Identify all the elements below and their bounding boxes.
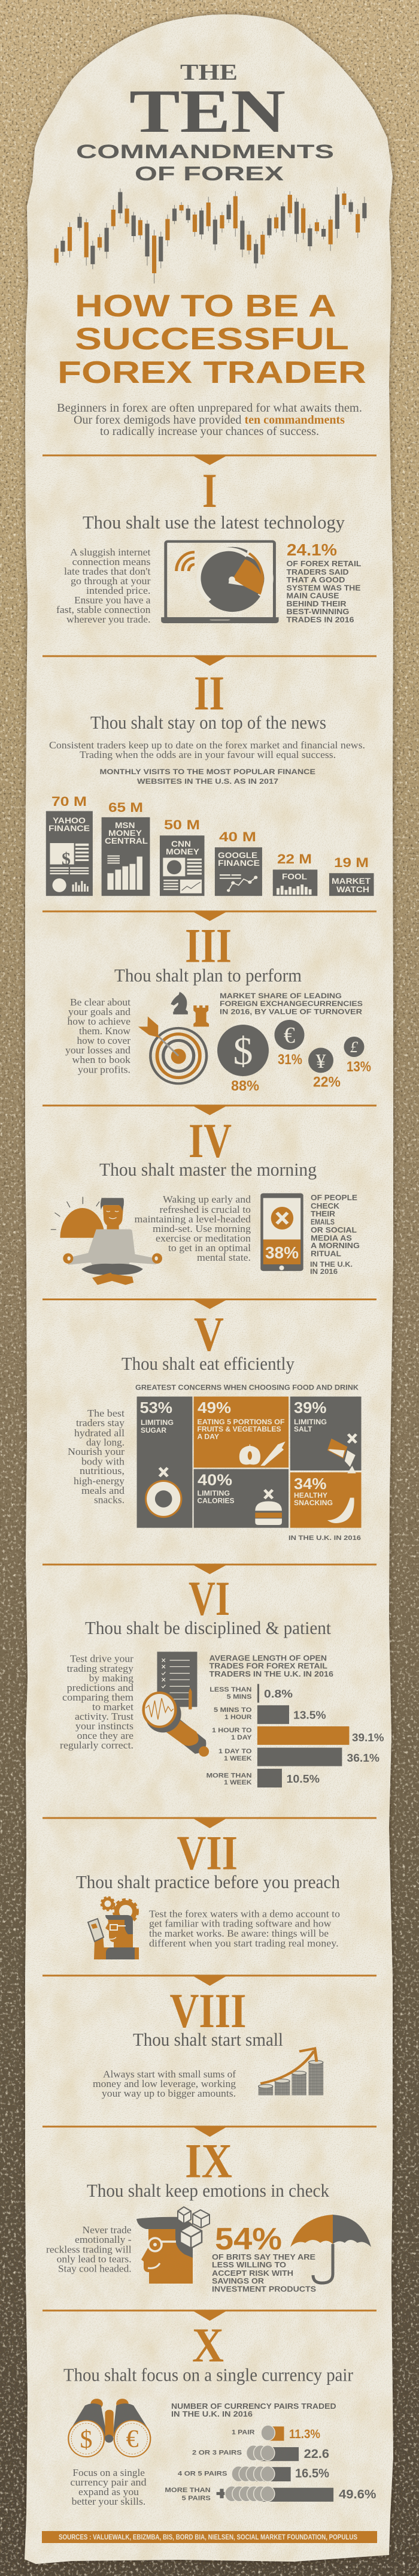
chart title: TRADERS IN THE U.K. IN 2016 <box>210 1669 333 1678</box>
bar labels <box>48 816 371 894</box>
stat text: IN THE U.K. <box>310 1260 353 1269</box>
row labels: 1 DAY <box>231 1734 252 1741</box>
row labels: 1 WEEK <box>224 1779 252 1786</box>
text block: get familiar with trading software and how <box>149 1918 332 1929</box>
row labels: 4 OR 5 PAIRS <box>178 2470 227 2477</box>
stat: 24.1%: BEHIND THEIR <box>286 599 347 608</box>
text block <box>68 1408 125 1506</box>
panel: commandment IV <box>51 1113 360 1285</box>
text block <box>93 2068 236 2099</box>
text block: Stay cool headed. <box>58 2263 132 2275</box>
title: TEN <box>129 77 286 146</box>
chart title: TRADES FOR FOREX RETAIL <box>210 1662 327 1671</box>
tile labels: SNACKING <box>294 1499 333 1507</box>
values: 22.6 <box>304 2447 329 2461</box>
values <box>289 2427 377 2502</box>
bar labels: MSN <box>115 820 135 830</box>
text block: A sluggish internet <box>70 546 151 558</box>
text block: reckless trading will <box>46 2244 132 2255</box>
text block: go through at your <box>71 575 151 587</box>
text block: day long. <box>86 1437 125 1448</box>
bars <box>46 811 374 896</box>
icon: binoculars: € <box>126 2426 139 2453</box>
values: 49.6% <box>339 2488 377 2502</box>
text block <box>56 546 151 625</box>
text block <box>60 1653 134 1751</box>
tile labels: HEALTHY <box>294 1491 327 1499</box>
text block: intended price. <box>86 585 151 596</box>
text block <box>70 2467 147 2507</box>
text block: Ensure you have a <box>74 594 151 606</box>
text block: nutritious, <box>80 1465 125 1476</box>
text block: Trading when the odds are in your favour will equal success. <box>80 749 336 760</box>
stat: 24.1%: MAIN CAUSE <box>286 591 339 600</box>
panel: commandment VIII: Thou shalt start small <box>133 2029 283 2050</box>
chart title: IN 2016, BY VALUE OF TURNOVER <box>220 1008 362 1016</box>
icon: checklist and magnifier <box>144 1652 209 1757</box>
tile labels: 39% <box>294 1399 327 1417</box>
intro text: Our forex demigods have provided ten commandments <box>74 413 345 427</box>
text block: by making <box>89 1672 134 1684</box>
text block: body with <box>81 1456 125 1467</box>
text block: your losses and <box>65 1044 131 1056</box>
chart note: IN THE U.K. IN 2016 <box>289 1535 361 1542</box>
stat text: CHECK <box>311 1201 340 1210</box>
panel: commandment IV: Thou shalt master the morning <box>99 1159 317 1180</box>
text block: Nourish your <box>68 1446 125 1457</box>
bar labels: MONEY <box>166 847 200 856</box>
title: COMMANDMENTS <box>76 141 334 162</box>
bubble chart: currencies: $ <box>233 1029 253 1073</box>
text block <box>149 1908 340 1949</box>
panel: commandment VII <box>76 1825 340 1959</box>
sources bar: SOURCES : VALUEWALK, EBIZMBA, BIS, BORD BIA, NIELSEN, SOCIAL MARKET FOUNDATION, POPULUS <box>59 2533 357 2541</box>
row labels: 5 MINS TO <box>214 1707 252 1714</box>
text block: currency pair and <box>70 2477 147 2488</box>
text block: Never trade <box>83 2224 132 2236</box>
text block: comparing them <box>62 1692 133 1703</box>
row labels: 1 HOUR <box>224 1714 252 1721</box>
values: 36.1% <box>347 1752 379 1764</box>
row labels: MORE THAN <box>207 1772 252 1780</box>
values: 11.3% <box>289 2427 320 2441</box>
panel: commandment X: Thou shalt focus on a single currency pair <box>63 2364 354 2385</box>
stat: 54%: ACCEPT RISK WITH <box>212 2269 293 2278</box>
bar icons <box>50 843 312 895</box>
text block: your profits. <box>78 1064 130 1075</box>
text block: hydrated all <box>74 1427 125 1439</box>
stat: 24.1% <box>286 540 362 624</box>
candlestick chart <box>54 187 366 283</box>
tile labels: A DAY <box>198 1432 219 1440</box>
text block: emotionally - <box>75 2234 132 2245</box>
text block <box>134 1194 251 1263</box>
text block: Test drive your <box>70 1653 133 1665</box>
text block: once they are <box>77 1730 133 1741</box>
bar labels: YAHOO <box>53 816 86 825</box>
stat text: OF PEOPLE <box>311 1193 357 1202</box>
panel: commandment V: Thou shalt eat efficiently <box>122 1353 294 1374</box>
bar labels: MARKET <box>332 876 371 886</box>
icon: laptop with speed gauge and wifi <box>161 542 279 623</box>
panel: commandment II <box>46 666 374 896</box>
text block: Test the forex waters with a demo account to <box>149 1908 340 1920</box>
subtitle: SUCCESSFUL <box>75 322 349 357</box>
panel: commandment V: V <box>194 1307 224 1361</box>
stat: 24.1%: THAT A GOOD <box>286 575 345 584</box>
values: 10.5% <box>286 1773 320 1785</box>
text block: Always start with small sums of <box>103 2068 236 2080</box>
tile labels: FRUITS & VEGETABLES <box>198 1425 281 1433</box>
text block: maintaining a level-headed <box>134 1213 251 1225</box>
row labels: 5 MINS <box>227 1693 251 1701</box>
chart title: NUMBER OF CURRENCY PAIRS TRADED <box>171 2402 336 2411</box>
row labels: 1 HOUR TO <box>212 1727 252 1734</box>
stat text: THEIR <box>311 1209 336 1218</box>
bubble chart: currencies: 88% <box>231 1078 259 1094</box>
text block: your instincts <box>75 1720 133 1732</box>
text block <box>49 739 365 760</box>
stat: 54%: LESS WILLING TO <box>212 2260 286 2269</box>
text block: your goals and <box>68 1006 131 1017</box>
text block: better your skills. <box>72 2496 145 2507</box>
panel: commandment IV: IV <box>189 1113 232 1168</box>
bubble chart: currencies: 31% <box>278 1052 302 1068</box>
stat: 54%: 54% <box>215 2222 282 2257</box>
icon: growing coin stacks with arrow <box>259 2049 323 2095</box>
tile labels: CALORIES <box>198 1497 235 1505</box>
tile labels: LIMITING <box>294 1418 327 1426</box>
stat: 24.1%: 24.1% <box>287 540 337 559</box>
stat text: EMAILS <box>311 1218 335 1227</box>
bar labels: WATCH <box>336 884 369 894</box>
stat: 54% <box>212 2222 316 2294</box>
bar labels: MONEY <box>108 828 142 838</box>
tile labels: EATING 5 PORTIONS OF <box>198 1418 285 1426</box>
bar chart: currency pairs <box>165 2425 377 2502</box>
text block: late trades that don't <box>64 566 151 577</box>
bars <box>257 1684 349 1787</box>
bubble chart: currencies: ¥ <box>316 1050 326 1073</box>
panel: commandment I: Thou shalt use the latest technology <box>83 512 345 533</box>
tile labels: 49% <box>198 1399 231 1417</box>
subtitle: FOREX TRADER <box>57 355 366 390</box>
row labels: 1 PAIR <box>232 2429 254 2436</box>
tile labels: LIMITING <box>141 1418 174 1427</box>
panel: commandment IX: Thou shalt keep emotions in check <box>87 2180 329 2201</box>
icon: trader with phone and gears <box>88 1897 139 1959</box>
stat: 24.1%: SYSTEM WAS THE <box>286 584 361 592</box>
text block: Focus on a single <box>72 2467 145 2478</box>
stat: 54%: OF BRITS SAY THEY ARE <box>212 2252 315 2261</box>
chart title <box>99 768 315 786</box>
panel: commandment V <box>68 1307 362 1542</box>
stat text: OR SOCIAL <box>311 1225 357 1234</box>
bar labels: FINANCE <box>218 858 260 868</box>
title: OF FOREX <box>135 162 284 185</box>
text block: exercise or meditation <box>156 1233 251 1244</box>
values: 0.8% <box>264 1688 293 1700</box>
panel: commandment II: Thou shalt stay on top of the news <box>90 712 326 733</box>
row labels: 1 WEEK <box>224 1755 252 1762</box>
panel: commandment IX <box>46 2133 371 2294</box>
title: THE <box>180 60 238 85</box>
panel: commandment X: X <box>192 2318 224 2372</box>
text block: traders stay <box>76 1417 125 1429</box>
text block: mind-set. Use morning <box>153 1223 251 1234</box>
icon: umbrella <box>290 2215 371 2283</box>
text block: how to cover <box>77 1035 130 1046</box>
text block: wherever you trade. <box>66 614 151 625</box>
text block: only lead to tears. <box>57 2254 132 2265</box>
panel: commandment VII: Thou shalt practice before you preach <box>76 1871 340 1892</box>
values: 65 M <box>108 800 143 815</box>
bar labels: CENTRAL <box>105 836 148 845</box>
subtitle <box>57 289 366 390</box>
stat text <box>310 1193 360 1276</box>
bar chart: open trade length <box>207 1684 384 1787</box>
text block: to get in an optimal <box>168 1242 251 1254</box>
bar labels: GOOGLE <box>218 850 257 860</box>
text block: high-energy <box>74 1475 125 1487</box>
text block: how to achieve <box>67 1016 130 1027</box>
chart title: MONTHLY VISITS TO THE MOST POPULAR FINANCE <box>99 768 315 776</box>
text block: expand as you <box>78 2486 139 2498</box>
bar labels: FOOL <box>282 871 307 881</box>
tile labels: 53% <box>140 1399 172 1417</box>
section dividers <box>42 454 377 2321</box>
bar chart: monthly visits: $ <box>62 849 71 869</box>
text block: your way up to bigger amounts. <box>102 2088 236 2099</box>
values: 40 M <box>219 829 256 844</box>
text block: the market works. Be aware: things will be <box>149 1928 329 1939</box>
row labels: LESS THAN <box>210 1686 251 1693</box>
stat: 24.1%: TRADES IN 2016 <box>286 615 354 624</box>
stat text: MEDIA AS <box>311 1233 352 1243</box>
text block: connection means <box>72 556 151 567</box>
chart title <box>220 992 363 1016</box>
values: 13.5% <box>293 1709 326 1721</box>
bars and coins <box>217 2425 333 2502</box>
text block: to market <box>92 1701 133 1713</box>
text block: money and low leverage, working <box>93 2078 236 2089</box>
sources bar <box>42 2531 377 2543</box>
text block: snacks. <box>94 1494 125 1506</box>
text block: trading strategy <box>67 1663 134 1674</box>
stat: 24.1%: TRADERS SAID <box>286 567 348 576</box>
panel: commandment I <box>56 463 362 625</box>
icon: meditating man and sun <box>51 1197 162 1285</box>
panel: commandment III: Thou shalt plan to perform <box>114 965 302 986</box>
panel: commandment I: I <box>202 463 217 518</box>
text block: fast, stable connection <box>56 604 151 615</box>
chart title <box>171 2402 336 2418</box>
text block: Consistent traders keep up to date on the forex market and financial news. <box>49 739 365 751</box>
stat: 54%: INVESTMENT PRODUCTS <box>212 2284 316 2294</box>
panel: commandment X <box>42 2318 377 2543</box>
stat text: A MORNING <box>311 1241 360 1250</box>
stat: 24.1%: OF FOREX RETAIL <box>286 559 362 568</box>
chart title: FOREIGN EXCHANGECURRENCIES <box>220 999 363 1008</box>
tile labels: LIMITING <box>198 1489 230 1497</box>
text block: Waking up early and <box>163 1194 251 1205</box>
intro text: Beginners in forex are often unprepared for what awaits them. <box>57 401 362 415</box>
treemap: food concerns <box>137 1397 362 1528</box>
bubble chart: currencies: 22% <box>313 1074 341 1091</box>
bar chart: monthly visits <box>46 794 374 896</box>
icon: chess pieces and target <box>138 992 209 1083</box>
stat: 54%: SAVINGS OR <box>212 2276 265 2285</box>
row labels <box>207 1686 252 1786</box>
chart title: GREATEST CONCERNS WHEN CHOOSING FOOD AND DRINK <box>135 1384 359 1392</box>
text block: activity. Trust <box>75 1711 133 1722</box>
text block: different when you start trading real money. <box>149 1938 339 1949</box>
text block: when to book <box>72 1054 131 1065</box>
text block: mental state. <box>197 1252 251 1263</box>
text block <box>65 996 131 1075</box>
panel: commandment VII: VII <box>177 1825 238 1880</box>
tile labels: 34% <box>294 1475 327 1493</box>
text block: regularly correct. <box>60 1740 133 1751</box>
panel: commandment VI: Thou shalt be disciplined & patient <box>85 1617 331 1638</box>
bubble chart: currencies <box>217 1020 371 1094</box>
stat text: IN 2016 <box>310 1267 338 1276</box>
tile labels: 40% <box>198 1470 232 1488</box>
text block: them. Know <box>79 1025 131 1037</box>
text block: refreshed is crucial to <box>159 1204 251 1215</box>
panel: commandment III: III <box>185 918 232 973</box>
subtitle: HOW TO BE A <box>75 289 336 324</box>
panel: commandment VI <box>60 1571 384 1787</box>
values: 39.1% <box>352 1732 384 1744</box>
text block: The best <box>87 1408 125 1419</box>
tile labels: SUGAR <box>141 1426 166 1435</box>
panel: commandment IX: IX <box>185 2133 232 2188</box>
chart title: AVERAGE LENGTH OF OPEN <box>210 1654 327 1662</box>
row labels: MORE THAN <box>165 2487 211 2494</box>
panel: commandment III <box>65 918 371 1094</box>
values <box>51 794 369 870</box>
chart title: MARKET SHARE OF LEADING <box>220 992 342 1000</box>
chart title: IN THE U.K. IN 2016 <box>171 2409 253 2418</box>
text block: Be clear about <box>70 996 130 1008</box>
values <box>264 1688 384 1785</box>
icon: binoculars: $ <box>80 2426 92 2454</box>
intro text <box>57 401 362 438</box>
stat text: RITUAL <box>311 1249 341 1258</box>
values: 19 M <box>334 855 369 870</box>
values: 70 M <box>51 794 87 809</box>
bubble chart: currencies: 13% <box>347 1059 371 1075</box>
panel: commandment VIII <box>93 1983 323 2099</box>
chart title <box>210 1654 333 1678</box>
stat: 24.1%: BEST-WINNING <box>286 607 350 616</box>
row labels <box>165 2429 254 2502</box>
title <box>76 60 334 185</box>
chart title: WEBSITES IN THE U.S. AS IN 2017 <box>137 777 278 786</box>
values: 16.5% <box>295 2467 329 2481</box>
values: 22 M <box>277 851 312 866</box>
icon: smartphone 38% <box>260 1193 303 1271</box>
text block: meals and <box>81 1485 125 1496</box>
tile labels <box>140 1399 333 1507</box>
bar labels: FINANCE <box>48 823 90 833</box>
row labels: 5 PAIRS <box>182 2495 211 2502</box>
bubble chart: currencies: £ <box>350 1038 359 1056</box>
tiles and food icons <box>137 1397 362 1528</box>
text block: predictions and <box>67 1682 134 1693</box>
icon: cool head with ice cubes <box>136 2207 210 2284</box>
bubble chart: currencies: € <box>284 1023 295 1048</box>
values: 50 M <box>164 817 200 832</box>
icon: smartphone 38%: 38% <box>265 1243 299 1262</box>
icon: binoculars <box>68 2399 150 2457</box>
panel: commandment II: II <box>194 666 224 720</box>
panel: commandment VI: VI <box>189 1571 230 1626</box>
intro text: to radically increase your chances of success. <box>100 425 319 438</box>
text block <box>46 2224 132 2275</box>
tile labels: SALT <box>294 1425 312 1433</box>
panel: commandment VIII: VIII <box>170 1983 247 2038</box>
bar labels: CNN <box>171 839 191 848</box>
row labels: 1 DAY TO <box>218 1748 252 1755</box>
row labels: 2 OR 3 PAIRS <box>192 2450 242 2457</box>
